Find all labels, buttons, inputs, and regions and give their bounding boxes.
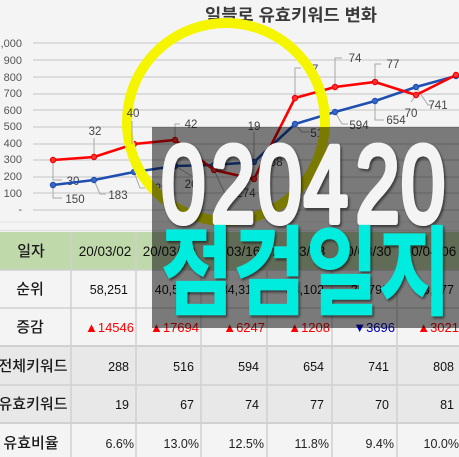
total keyword row: 516 xyxy=(173,360,194,374)
date row: 20/03/16 xyxy=(208,244,260,259)
y axis labels: 700 xyxy=(4,88,22,100)
valid ratio row: 9.4% xyxy=(366,437,394,451)
rank row: 40,557 xyxy=(155,283,193,297)
valid keyword row: 77 xyxy=(310,398,324,412)
y axis labels: 800 xyxy=(4,72,22,84)
red series: 유효키워드 xyxy=(50,72,459,182)
data labels: 150 xyxy=(65,194,85,206)
valid keyword row: 67 xyxy=(180,398,194,412)
grey keyword rows xyxy=(0,346,459,423)
y axis labels: 600 xyxy=(4,105,22,117)
line chart xyxy=(0,38,459,222)
data labels: 594 xyxy=(349,120,369,132)
data label over circle: 40: 40 xyxy=(127,108,139,120)
rank row: 33,102 xyxy=(286,283,324,297)
valid keyword row: 81 xyxy=(440,398,454,412)
data labels xyxy=(65,53,448,206)
y axis labels: - xyxy=(18,204,22,216)
row headers: 유효비율 xyxy=(3,435,59,452)
valid keyword row: 70 xyxy=(375,398,389,412)
rank row: 36,798 xyxy=(351,283,389,297)
row headers xyxy=(0,243,68,452)
change row: ▲3021 xyxy=(417,320,459,335)
data labels: 654 xyxy=(386,115,406,127)
row headers: 일자 xyxy=(17,243,45,260)
y axis labels: 100 xyxy=(4,188,22,200)
valid ratio row: 10.0% xyxy=(424,437,459,451)
y axis labels: 500 xyxy=(4,121,22,133)
data labels: 32 xyxy=(89,126,101,138)
data labels: 74 xyxy=(349,53,362,65)
date row: 20/03/23 xyxy=(273,244,325,259)
date row xyxy=(79,244,456,259)
data labels: 741 xyxy=(428,100,448,112)
date row: 20/04/06 xyxy=(404,244,456,259)
valid keyword row xyxy=(115,398,454,412)
data labels: 229 xyxy=(148,183,168,195)
data labels: 516 xyxy=(310,128,330,140)
rank row: 33,777 xyxy=(416,283,454,297)
change row: ▲1208 xyxy=(288,320,330,335)
yellow highlight circle xyxy=(127,23,325,221)
valid ratio row: 11.8% xyxy=(294,437,329,451)
data label over circle: 40 xyxy=(127,108,139,144)
chart title: 일블로 유효키워드 변화 xyxy=(205,1,377,26)
y axis labels: 900 xyxy=(4,55,22,67)
data label leader lines xyxy=(53,58,433,198)
data table xyxy=(0,230,459,457)
total keyword row: 741 xyxy=(368,360,389,374)
change row: ▲6247 xyxy=(223,320,265,335)
dark overlay panel xyxy=(152,127,459,328)
valid ratio row xyxy=(106,437,459,451)
change row: ▼3696 xyxy=(353,320,395,335)
y axis labels: 200 xyxy=(4,171,22,183)
blue series: 전체키워드 xyxy=(50,73,459,188)
y axis labels xyxy=(0,38,22,216)
valid ratio row: 13.0% xyxy=(164,437,199,451)
y axis labels: 300 xyxy=(4,154,22,166)
change row: ▲14546 xyxy=(85,320,134,335)
data labels: 288 xyxy=(263,157,283,169)
change row xyxy=(85,320,459,335)
date row: 20/03/30 xyxy=(339,244,391,259)
total keyword row: 808 xyxy=(433,360,454,374)
data labels: 19 xyxy=(248,121,260,133)
date row: 20/03/09 xyxy=(143,244,195,259)
total keyword row: 654 xyxy=(303,360,324,374)
y axis labels: 400 xyxy=(4,138,22,150)
rank row: 58,251 xyxy=(90,283,128,297)
data labels: 70 xyxy=(405,108,417,120)
row headers: 전체키워드 xyxy=(0,358,68,375)
table header background xyxy=(0,232,459,270)
change row: ▲17694 xyxy=(150,320,199,335)
valid ratio row: 6.6% xyxy=(106,437,134,451)
rank row: 34,310 xyxy=(221,283,259,297)
data labels: 183 xyxy=(108,190,128,202)
data labels: 274 xyxy=(236,188,256,200)
valid ratio row: 12.5% xyxy=(229,437,264,451)
rank row xyxy=(90,283,454,297)
data labels: 30 xyxy=(67,176,79,188)
valid keyword row: 74 xyxy=(245,398,259,412)
total keyword row: 594 xyxy=(238,360,259,374)
row headers: 순위 xyxy=(16,281,44,298)
row headers: 증감 xyxy=(16,319,44,336)
data labels: 67 xyxy=(306,64,318,76)
date row: 20/03/02 xyxy=(79,244,131,259)
total keyword row xyxy=(108,360,454,374)
data labels: 42 xyxy=(185,119,197,131)
headline number: 020420 xyxy=(161,123,445,246)
total keyword row: 288 xyxy=(108,360,129,374)
data labels: 77 xyxy=(387,59,399,71)
valid keyword row: 19 xyxy=(115,398,129,412)
data labels: 26 xyxy=(185,179,197,191)
row headers: 유효키워드 xyxy=(0,396,68,413)
